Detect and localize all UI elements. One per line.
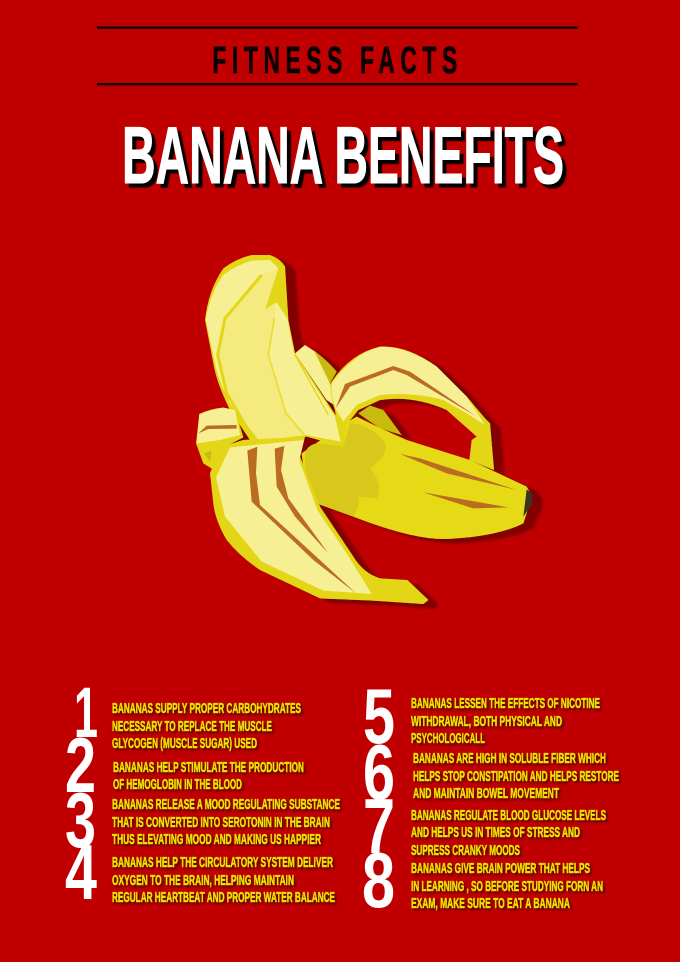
fact 3: BANANAS RELEASE A MOOD REGULATING SUBSTANCE xyxy=(112,797,340,813)
fact 2 xyxy=(113,760,304,793)
fact 7 xyxy=(411,808,606,859)
back peel xyxy=(205,255,343,447)
fact 5: PSYCHOLOGICALL xyxy=(411,731,485,747)
stem tip xyxy=(523,489,532,517)
right peel xyxy=(331,347,494,470)
fact 4 xyxy=(112,855,335,906)
fact 8: EXAM, MAKE SURE TO EAT A BANANA xyxy=(411,896,570,912)
number 6: 6 xyxy=(363,728,395,816)
number 5: 5 xyxy=(363,672,395,760)
number 2: 2 xyxy=(65,721,96,809)
fact 2: OF HEMOGLOBIN IN THE BLOOD xyxy=(113,777,242,793)
fact 1: NECESSARY TO REPLACE THE MUSCLE xyxy=(112,719,272,735)
number 4: 4 xyxy=(65,828,97,916)
number 8: 8 xyxy=(362,836,395,924)
top rule xyxy=(97,26,578,29)
fact 4: REGULAR HEARTBEAT AND PROPER WATER BALANCE xyxy=(112,890,335,906)
front peel xyxy=(210,437,428,604)
fruit streaks xyxy=(400,454,517,508)
fact 8 xyxy=(411,861,603,912)
fact 3: THAT IS CONVERTED INTO SEROTONIN IN THE BRAIN xyxy=(112,815,330,831)
fact 4: BANANAS HELP THE CIRCULATORY SYSTEM DELIVER xyxy=(112,855,333,871)
fact 6 xyxy=(413,751,619,802)
heading: fitness facts: FITNESS FACTS xyxy=(212,39,457,81)
facts left column xyxy=(112,701,340,906)
bottom rule xyxy=(97,83,578,85)
number 1: 1 xyxy=(74,674,98,753)
front peel streaks xyxy=(247,447,356,593)
fact 4: OXYGEN TO THE BRAIN, HELPING MAINTAIN xyxy=(112,873,294,889)
fact 3 xyxy=(112,797,340,848)
illustration: peeled banana xyxy=(196,255,532,604)
fact 7: SUPRESS CRANKY MOODS xyxy=(411,843,520,859)
banana fruit xyxy=(295,345,532,539)
fact 2: BANANAS HELP STIMULATE THE PRODUCTION xyxy=(113,760,304,776)
facts right column xyxy=(411,696,619,912)
back peel centre panel xyxy=(218,268,304,440)
number 7: 7 xyxy=(363,782,395,870)
fact 3: THUS ELEVATING MOOD AND MAKING US HAPPIER xyxy=(112,832,321,848)
right peel streak xyxy=(336,366,477,417)
big numbers right xyxy=(362,672,395,924)
fact 5 xyxy=(411,696,600,747)
fact 1: GLYCOGEN (MUSCLE SUGAR) USED xyxy=(112,736,257,752)
left small peel xyxy=(196,408,243,471)
fact 6: AND MAINTAIN BOWEL MOVEMENT xyxy=(413,786,559,802)
fact 1 xyxy=(112,701,301,752)
fact 1: BANANAS SUPPLY PROPER CARBOHYDRATES xyxy=(112,701,301,717)
big numbers left xyxy=(65,674,98,916)
number 3: 3 xyxy=(65,776,96,864)
bruise patch xyxy=(305,423,386,517)
fact 5: WITHDRAWAL, BOTH PHYSICAL AND xyxy=(411,714,562,730)
